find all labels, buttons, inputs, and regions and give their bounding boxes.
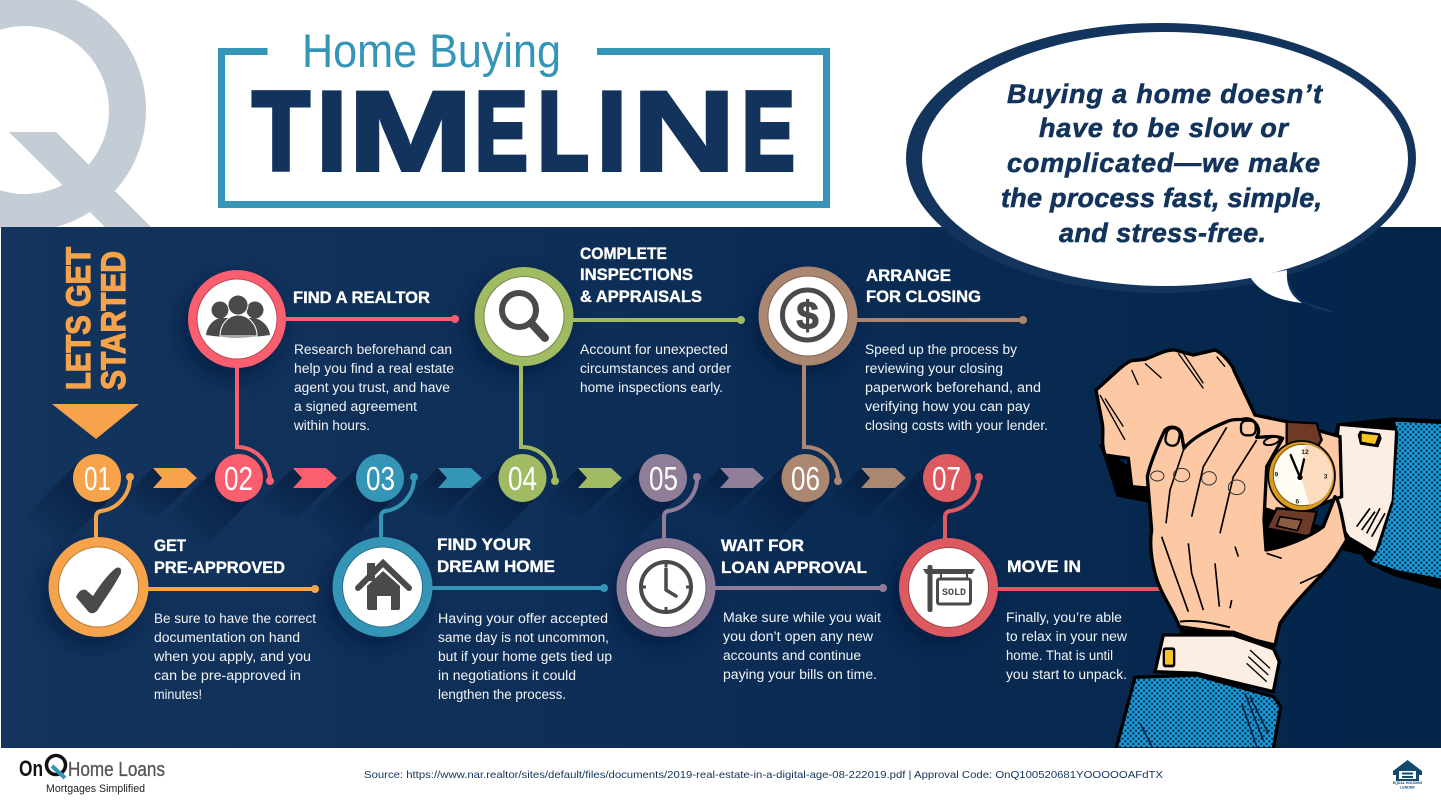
fist (1094, 348, 1344, 510)
upper sleeve and cuff (1333, 417, 1441, 589)
step 06: arrange for closing: reviewing your closing (865, 361, 1003, 376)
illustration: hands checking wristwatch (1096, 350, 1441, 749)
speech bubble callout: and stress-free. (1059, 218, 1266, 248)
speech bubble callout: have to be slow or (1039, 113, 1289, 143)
icon: dollar coin: $ (796, 294, 819, 338)
wristwatch (1267, 422, 1335, 537)
step 03: find your dream home (332, 454, 612, 702)
step 07: move in (899, 454, 1175, 682)
step 06: arrange for closing (758, 266, 1048, 502)
icon: equal housing lender (1393, 760, 1423, 790)
speech bubble callout: the process fast, simple, (1001, 183, 1322, 213)
lets get started label and arrow: STARTED (95, 251, 133, 390)
speech bubble callout: Buying a home doesn’t (1007, 79, 1323, 109)
step 03: find your dream home: same day is not uncommon, (438, 630, 609, 645)
shadow behind the watch (1266, 507, 1322, 548)
step 06: arrange for closing: FOR CLOSING (866, 287, 981, 306)
company logo: On (19, 756, 43, 781)
step 04: complete inspections and appraisals: circumstances and order (580, 361, 732, 376)
long shadows (25, 275, 992, 646)
title block: M (348, 68, 473, 196)
step 03: find your dream home: in negotiations it could (438, 668, 576, 683)
step 01: get pre-approved: PRE-APPROVED (154, 558, 285, 577)
step 05: wait for loan approval: Make sure while you wait (723, 610, 881, 625)
icon: equal housing lender: EQUAL HOUSING (1393, 781, 1423, 785)
step 01: get pre-approved (48, 454, 319, 702)
step 01: get pre-approved: when you apply, and you (153, 649, 311, 664)
step 02: find a realtor (188, 270, 459, 502)
step 05: wait for loan approval: accounts and continue (723, 648, 861, 663)
step 03: find your dream home: lengthen the process. (438, 687, 566, 702)
step 05: wait for loan approval: LOAN APPROVAL (721, 558, 867, 577)
step 07: move in: Finally, you’re able (1006, 610, 1122, 625)
step 05: wait for loan approval: paying your bills on time. (723, 667, 877, 682)
step 01: get pre-approved: Be sure to have the correct (154, 611, 316, 626)
icon: magnifying glass (502, 293, 545, 338)
lets get started label and arrow (52, 247, 139, 439)
title block (222, 24, 826, 204)
icon: house (358, 563, 409, 610)
step 01: get pre-approved: documentation on hand (154, 630, 300, 645)
main navy panel (1, 227, 1441, 748)
step 02: find a realtor: Research beforehand can (294, 342, 452, 357)
title block: N (632, 68, 736, 196)
wristwatch: 12 (1301, 449, 1309, 456)
step 06: arrange for closing: 06 (791, 460, 820, 497)
chevron arrows between steps (153, 468, 906, 488)
step 05: wait for loan approval: WAIT FOR (721, 536, 804, 555)
step 05: wait for loan approval: you don’t open any new (723, 629, 873, 644)
step 05: wait for loan approval: 05 (649, 460, 678, 497)
step 06: arrange for closing: ARRANGE (866, 266, 951, 285)
step 04: complete inspections and appraisals: Account for unexpected (580, 342, 728, 357)
step 04: complete inspections and appraisals (474, 244, 745, 502)
icon: sold sign (923, 565, 975, 612)
step 03: find your dream home: DREAM HOME (437, 557, 555, 576)
step 03: find your dream home: but if your home gets tied up (438, 649, 612, 664)
step 07: move in: home. That is until (1006, 648, 1113, 663)
step 01: get pre-approved: minutes! (154, 687, 202, 702)
step 06: arrange for closing: verifying how you can pay (865, 399, 1030, 414)
step 04: complete inspections and appraisals: INSPECTIONS (580, 265, 693, 284)
title block: E (742, 70, 795, 194)
icon: dollar coin (782, 290, 832, 340)
step 01: get pre-approved: GET (154, 536, 187, 555)
company logo: Mortgages Simplified (46, 783, 145, 795)
step 03: find your dream home: 03 (366, 460, 395, 497)
step 04: complete inspections and appraisals: 04 (508, 460, 537, 497)
wristwatch: 3 (1324, 474, 1328, 481)
speech bubble callout (906, 23, 1416, 313)
speech bubble callout: complicated—we make (1007, 148, 1320, 178)
step 02: find a realtor: agent you trust, and have (294, 380, 450, 395)
step 02: find a realtor: help you find a real estate (294, 361, 454, 376)
step 04: complete inspections and appraisals: home inspections early. (580, 380, 723, 395)
step 06: arrange for closing: closing costs with your lender. (865, 418, 1048, 433)
lower sleeve and cuff (1116, 631, 1281, 749)
icon: sold sign: SOLD (942, 588, 966, 599)
step 04: complete inspections and appraisals: COMPLETE (580, 244, 667, 263)
title block: Home Buying (302, 24, 561, 77)
step 02: find a realtor: within hours. (293, 418, 370, 433)
step 04: complete inspections and appraisals: & APPRAISALS (580, 287, 702, 306)
step 02: find a realtor: a signed agreement (294, 399, 417, 414)
step 03: find your dream home: FIND YOUR (437, 535, 531, 554)
step 02: find a realtor: 02 (224, 460, 253, 497)
step 01: get pre-approved: 01 (84, 460, 111, 497)
step 07: move in: MOVE IN (1007, 557, 1081, 576)
icon: clock (639, 560, 693, 614)
step 05: wait for loan approval (616, 454, 887, 682)
lets get started label and arrow: LETS GET (60, 247, 98, 390)
front hand (1147, 419, 1347, 645)
title block: T (252, 70, 310, 194)
title block: L (538, 70, 589, 194)
step 07: move in: 07 (932, 460, 961, 497)
icon: people (206, 295, 270, 338)
wristwatch: 6 (1295, 498, 1299, 505)
step 01: get pre-approved: can be pre-approved in (154, 668, 301, 683)
step 03: find your dream home: Having your offer accepted (438, 611, 608, 626)
company logo: Home Loans (68, 759, 165, 781)
icon: equal housing lender: LENDER (1400, 786, 1415, 790)
title block: I (596, 68, 628, 196)
company logo (19, 756, 165, 795)
step 02: find a realtor: FIND A REALTOR (293, 288, 430, 307)
title block: I (316, 68, 348, 196)
step 07: move in: you start to unpack. (1006, 667, 1127, 682)
step 06: arrange for closing: Speed up the process by (865, 342, 1017, 357)
source and approval code: Source: https://www.nar.realtor/sites/default/files/documents/2019-real-estate-in-a-digital-age-08-222019.pdf | Approval Code: OnQ100520681YOOOOOAFdTX (364, 769, 1163, 781)
step 06: arrange for closing: paperwork beforehand, and (865, 380, 1041, 395)
step 07: move in: to relax in your new (1006, 629, 1127, 644)
logo watermark: large Q (0, 8, 151, 227)
wristwatch: 9 (1274, 472, 1278, 479)
title block: E (475, 70, 528, 194)
